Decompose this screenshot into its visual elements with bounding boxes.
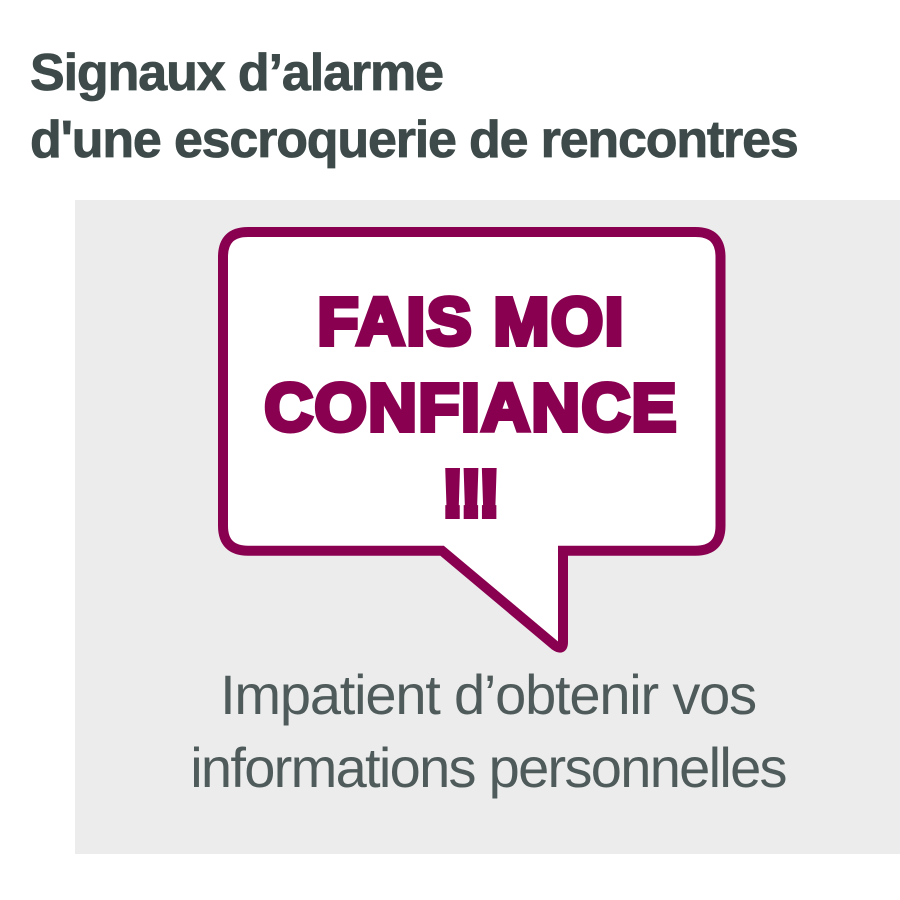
title [30, 44, 798, 169]
panel: grey background [75, 200, 900, 854]
title: Signaux d’alarme [30, 44, 443, 102]
bubble text: FAIS MOI [317, 284, 625, 360]
title: d'une escroquerie de rencontres [30, 111, 798, 169]
bubble text [265, 284, 678, 532]
bubble text: !!! [442, 456, 496, 532]
caption [190, 663, 786, 799]
bubble text: CONFIANCE [265, 370, 678, 446]
speech bubble [223, 232, 720, 648]
caption: informations personnelles [190, 736, 786, 799]
bubble outline [223, 232, 720, 648]
caption: Impatient d’obtenir vos [220, 663, 756, 726]
